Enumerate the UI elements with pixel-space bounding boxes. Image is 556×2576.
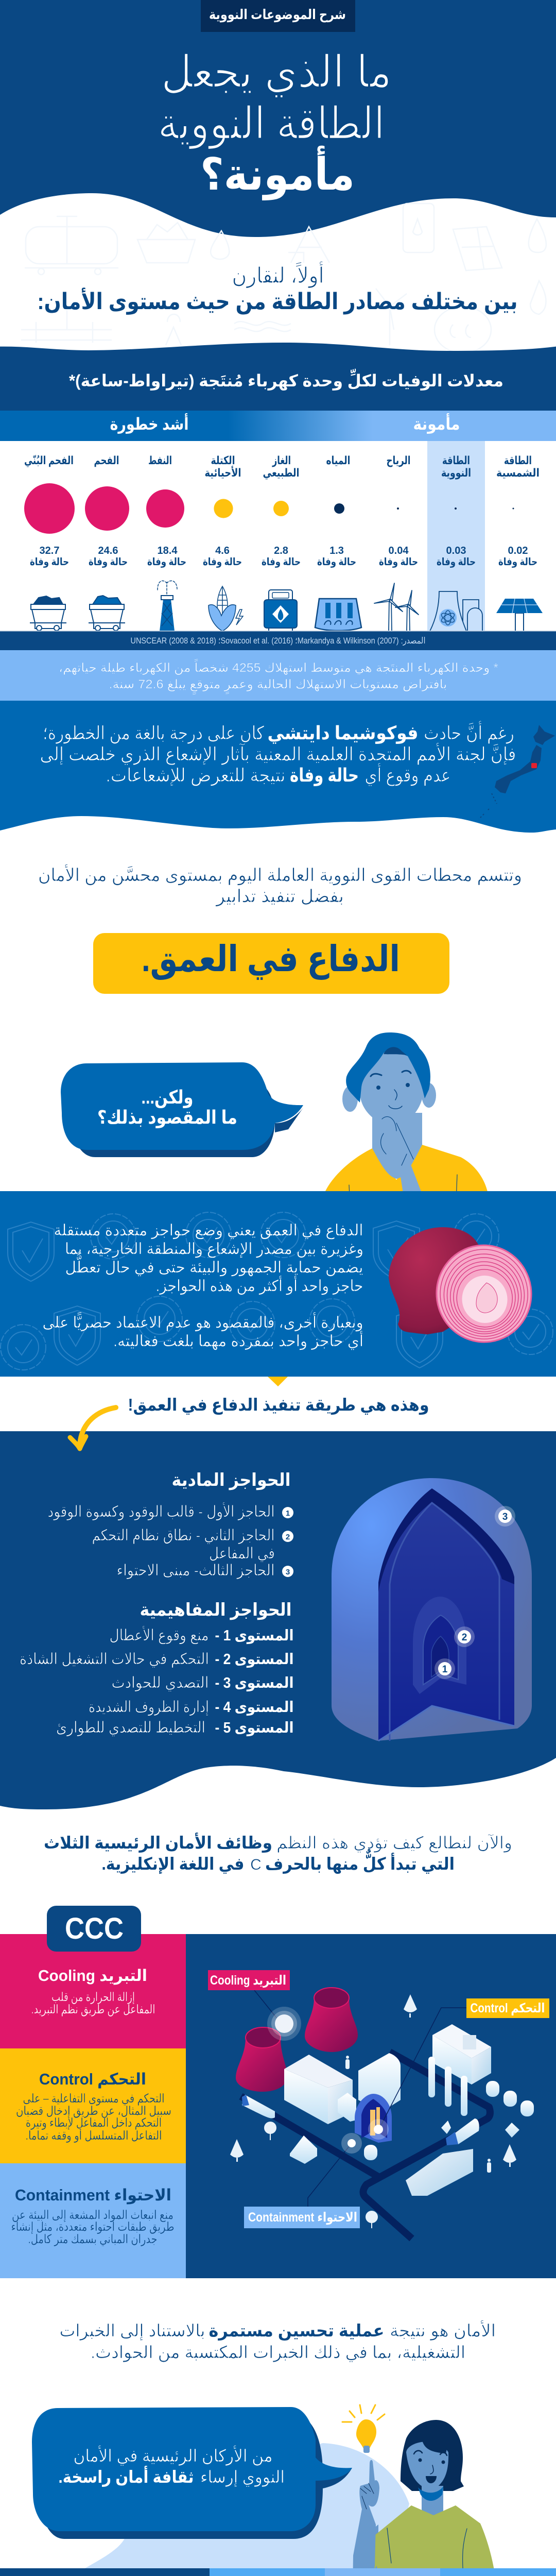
text block: three safety functions intro: التي تبدأ كلٌّ منها بالحرف: [265, 1849, 455, 1874]
tag: control: [466, 1998, 549, 2018]
text block: enhanced safety intro: [38, 864, 522, 907]
chart: energy source labels: النفط: [148, 454, 172, 467]
illustration: thinking man: [322, 1032, 490, 1240]
panel: defence in depth explanation: [0, 1191, 556, 1377]
panel: containment: طريق طبقات احتواء متعددة، مثل إنشاء: [11, 2220, 174, 2234]
text block: three safety functions intro: [44, 1832, 512, 1874]
gradient scale: safest to most dangerous: أشد خطورة: [110, 413, 188, 434]
chart: death rate values: 24.6: [98, 545, 118, 556]
section: physical barriers list: 1: [286, 1509, 290, 1518]
markers: [267, 2007, 389, 2154]
callout lines: [254, 1990, 466, 2207]
panel: containment: الاحتواء Containment: [15, 2186, 171, 2205]
chart: energy source labels: [24, 454, 540, 480]
source strip: [0, 631, 556, 650]
pipes: [428, 2057, 467, 2116]
buildings: [284, 2024, 519, 2196]
section: physical barriers list: الحاجز الأول - قالب الوقود وكسوة الوقود: [47, 1501, 275, 1521]
panel: containment: جدران المباني بسمك متر كامل.: [28, 2232, 158, 2246]
speech bubble: safety culture: من الأركان الرئيسية في الأمان: [73, 2445, 273, 2466]
panel: cooling: [0, 1934, 186, 2048]
chart: death rate values: 4.6: [215, 545, 230, 556]
panel: containment: [0, 2163, 186, 2278]
illustration: nuclear power plant panel: [186, 1934, 556, 2278]
text block: defence in depth definition: أي حاجز واحد بمفرده مهما بلغت فعاليته.: [113, 1330, 363, 1350]
header tag: nuclear explained: [201, 0, 355, 32]
illustration: reactor containment cross-section: 2: [462, 1632, 467, 1643]
chart: energy source labels: المياه: [326, 454, 350, 467]
title: ما الذي يجعل: [161, 47, 392, 98]
illustration: reactor containment cross-section: 3: [502, 1512, 508, 1522]
chart: energy source labels: الكتلة: [211, 454, 235, 467]
speech bubble: but what does that mean: ما المقصود بذلك؟: [97, 1107, 237, 1128]
chart: energy source labels: الشمسية: [496, 466, 540, 479]
panel: barriers background: [0, 1431, 556, 1809]
text block: Fukushima statement: رغم أنَّ حادث: [424, 721, 514, 744]
footnote band: بافتراض مستويات الاستهلاك الحالية وعمرٍ متوقعٍ يبلغ 72.6 سنة.: [109, 677, 447, 695]
mini containment with rods: [355, 2094, 392, 2143]
section: conceptual barriers list: إدارة الظروف الشديدة: [89, 1699, 209, 1716]
icon: map of Japan with Fukushima marked: [479, 725, 555, 819]
section: conceptual barriers list: التصدي للحوادث: [111, 1674, 209, 1691]
tag: containment: [244, 2207, 360, 2228]
tanks: [364, 2081, 534, 2160]
text block: enhanced safety intro: وتتسم محطات القوى النووية العاملة اليوم بمستوى محسَّن من الأمان: [38, 864, 522, 886]
chart: death rate values: حالة وفاة: [379, 556, 418, 568]
badge: CCC: [47, 1906, 141, 1952]
text block: three safety functions intro: وظائف الأمان الرئيسية الثلاث: [44, 1832, 272, 1853]
arrow: downward triangle: [268, 1377, 288, 1386]
chart: death rate values: 18.4: [158, 545, 178, 556]
chart: energy source labels: الفحم: [94, 454, 119, 467]
icon: coal cart: [89, 596, 125, 631]
text block: defence in depth definition: وبعبارة أخرى، فالمقصود هو عدم الاعتماد حصريًّا على: [42, 1312, 363, 1332]
card: questioning attitude: [210, 2568, 325, 2576]
section: physical barriers list: [47, 1470, 293, 1579]
chart: energy source labels: الطاقة: [504, 454, 532, 467]
panel: cooling: التبريد Cooling: [38, 1967, 147, 1985]
panel: control: سبيل المثال، عن طريق إدخال قضبان: [16, 2104, 171, 2119]
panel: hero background with wavy edge: [0, 0, 556, 237]
tag: control: التحكم Control: [470, 2001, 545, 2015]
chart: energy source labels: الطبيعي: [263, 466, 300, 480]
title: [158, 47, 392, 200]
illustration: reactor containment cross-section: [332, 1478, 532, 1741]
chart: energy source labels: الأحيائية: [205, 465, 241, 479]
chart: death rate values: حالة وفاة: [203, 556, 242, 568]
panel: cooling: إزالة الحرارة من قلب: [51, 1990, 135, 2005]
chart: energy source labels: الطاقة: [442, 454, 470, 467]
section: conceptual barriers list: التخطيط للتصدي للطوارئ: [56, 1719, 205, 1736]
panel: chart heading band: معدلات الوفيات لكلِّ وحدة كهرباء مُنتَجة (تيراواط-ساعة)*: [69, 368, 503, 391]
comparison intro heading: [37, 261, 518, 315]
chart: death rate values: حالة وفاة: [498, 556, 537, 568]
callout: defence in depth: الدفاع في العمق.: [142, 939, 400, 980]
comparison intro heading: أولاً، لنقارن: [232, 261, 324, 288]
illustration: woman with idea: [342, 2405, 494, 2576]
section: conceptual barriers list: التحكم في حالات التشغيل الشاذة: [20, 1651, 209, 1668]
icon: oil derrick: [158, 581, 177, 631]
section: conceptual barriers list: المستوى 4 -: [215, 1699, 293, 1716]
text block: Fukushima statement: فإنَّ لجنة الأمم المتحدة العلمية المعنية بآثار الإشعاع الذري خلصت إلى: [40, 742, 516, 765]
callout: defence in depth: [93, 933, 449, 994]
chart: death rate values: حالة وفاة: [437, 556, 476, 568]
chart: energy source labels: الغاز: [272, 454, 291, 467]
speech bubble: safety culture: [32, 2407, 352, 2539]
title: الطاقة النووية: [158, 99, 385, 149]
chart: death rate values: حالة وفاة: [317, 556, 356, 568]
chart: energy source labels: الرياح: [386, 454, 411, 467]
icon: wind turbines: [374, 583, 419, 631]
background blob behind woman: [85, 2443, 409, 2568]
trucks: [242, 2095, 479, 2145]
icon: natural gas cylinder: [264, 590, 297, 631]
section: conceptual barriers list: [20, 1600, 293, 1736]
gradient scale: safest to most dangerous: [0, 411, 556, 441]
icon: hydro dam: [315, 599, 361, 631]
footnote band: * وحدة الكهرباء المنتَجة هي متوسط استهلاك 4255 شخصاً من الكهرباء طيلة حياتهم،: [59, 659, 498, 675]
section: conceptual barriers list: المستوى 1 -: [215, 1628, 293, 1644]
background: faint energy icon pattern: [21, 204, 546, 353]
chart: energy source labels: الفحم البُنّي: [24, 454, 74, 467]
chart: death rate values: 2.8: [274, 545, 288, 556]
section: conceptual barriers list: المستوى 2 -: [215, 1651, 293, 1668]
trees: [230, 1994, 516, 2228]
icon: solar panel: [496, 599, 543, 631]
source strip: المصدر: Markandya & Wilkinson (2007)؛ Sovacool et al. (2016)؛ UNSCEAR (2008 & 2018): [131, 636, 425, 646]
panel: safety culture explanation: [0, 2568, 210, 2576]
chart: death rate values: حالة وفاة: [147, 556, 186, 568]
footnote band: [0, 650, 556, 701]
highlight column: nuclear: [427, 441, 485, 631]
badge: CCC: CCC: [65, 1912, 124, 1945]
text block: continuous improvement: التشغيلية، بما في ذلك الخبرات المكتسبة من الحوادث.: [91, 2343, 465, 2362]
section: conceptual barriers list: الحواجز المفاهيمية: [140, 1600, 291, 1620]
text block: defence in depth definition: [42, 1222, 363, 1350]
panel: containment: منع انبعاث المواد المشعة إلى البيئة عن: [12, 2208, 173, 2223]
section: conceptual barriers list: المستوى 5 -: [215, 1720, 293, 1736]
chart: death rate values: 0.02: [508, 545, 528, 556]
tower: front cooling tower: [236, 2027, 287, 2092]
text block: three safety functions intro: والآن لنطالع كيف تؤدي هذه النظم: [276, 1833, 512, 1853]
arrow: curved yellow arrow: [70, 1408, 116, 1449]
icon: nuclear plant: [430, 591, 482, 631]
text block: defence in depth definition: يضمن حماية الجمهور والبيئة حتى في حال تعطُّل: [65, 1251, 363, 1277]
chart: death rate values: 32.7: [40, 545, 59, 556]
text block: continuous improvement: بالاستناد إلى الخبرات: [60, 2321, 205, 2341]
section: physical barriers list: الحواجز المادية: [172, 1470, 290, 1490]
section: physical barriers list: الحاجز الثاني - نطاق نظام التحكم: [92, 1527, 275, 1545]
gradient scale: safest to most dangerous: مأمونة: [413, 413, 460, 434]
text block: enhanced safety intro: بفضل تنفيذ تدابير: [215, 887, 344, 907]
panel: chart heading band: [0, 343, 556, 411]
chart: death rate values: [30, 545, 537, 568]
section: physical barriers list: 3: [286, 1568, 290, 1577]
section: physical barriers list: 2: [286, 1533, 290, 1541]
text block: continuous improvement: [60, 2320, 496, 2362]
panel: Fukushima background: [0, 701, 556, 833]
people: [345, 2056, 491, 2173]
chart: energy source labels: النووية: [441, 466, 471, 480]
panel: control: التحكم Control: [39, 2070, 146, 2089]
text block: continuous improvement: الأمان هو نتيجة: [390, 2320, 496, 2341]
chart: death rate values: 0.04: [389, 545, 409, 556]
speech bubble: safety culture: ثقافة أمان راسخة.: [59, 2466, 194, 2487]
chart: death rate values: حالة وفاة: [89, 556, 128, 568]
text block: defence in depth definition: حاجز واحد أو أكثر من هذه الحواجز.: [155, 1275, 363, 1295]
card: open communication: [440, 2568, 556, 2576]
icon: lignite cart: [30, 596, 66, 631]
text block: three safety functions intro: في اللغة الإنكليزية.: [102, 1854, 244, 1874]
text block: Fukushima statement: عدم وقوع أي: [364, 763, 451, 786]
panel: control: [0, 2048, 186, 2163]
panel: control: التفاعل المتسلسل أو وقفه تماما.: [26, 2127, 162, 2143]
icon: biomass corn: [208, 586, 243, 631]
section: physical barriers list: في المفاعل: [209, 1545, 275, 1563]
chart: death rate values: حالة وفاة: [30, 556, 69, 568]
header tag: nuclear explained: شرح الموضوعات النووية: [209, 7, 346, 23]
card: rigorous and prudent approach: [325, 2568, 440, 2576]
panel: control: التحكم داخل المفاعل لإبطاء وتيرة: [26, 2116, 162, 2130]
section: physical barriers list: الحاجز الثالث- مبنى الاحتواء: [116, 1562, 275, 1579]
heading: how defence in depth is applied: وهذه هي طريقة تنفيذ الدفاع في العمق!: [128, 1395, 429, 1415]
speech bubble: safety culture: النووي إرساء: [200, 2467, 285, 2487]
tag: containment: الاحتواء Containment: [248, 2210, 357, 2225]
background: shield and badge pattern: [1, 1212, 553, 1370]
chart: death rate bubbles: [24, 483, 514, 534]
text block: Fukushima statement: نتيجة للتعرض للإشعاعات.: [106, 765, 285, 786]
chart: death rate values: 1.3: [329, 545, 344, 556]
tower: back cooling tower: [305, 1988, 358, 2052]
chart: death rate values: حالة وفاة: [262, 556, 301, 568]
title: مأمونة؟: [200, 145, 355, 200]
chart: death rate values: 0.03: [446, 545, 466, 556]
speech bubble: but what does that mean: [61, 1062, 303, 1157]
speech bubble: but what does that mean: ولكن...: [141, 1087, 194, 1108]
panel: control: التحكم في مستوى التفاعلية – على: [23, 2092, 165, 2106]
section: conceptual barriers list: منع وقوع الأعطال: [109, 1625, 209, 1645]
illustration: red onion: [389, 1227, 537, 1348]
text block: continuous improvement: عملية تحسين مستمرة: [209, 2321, 384, 2341]
tag: cooling: [208, 1970, 290, 1990]
section: conceptual barriers list: المستوى 3 -: [215, 1675, 293, 1691]
text block: Fukushima statement: حالة وفاة: [290, 765, 359, 786]
text block: defence in depth definition: الدفاع في العمق يعني وضع حواجز متعددة مستقلة: [54, 1222, 363, 1240]
illustration: reactor containment cross-section: 1: [442, 1664, 448, 1675]
tag: cooling: التبريد Cooling: [210, 1973, 286, 1988]
text block: Fukushima statement: فوكوشيما دايتشي: [268, 722, 418, 744]
text block: Fukushima statement: كان على درجة بالغة من الخطورة؛: [43, 722, 265, 744]
text block: Fukushima statement: [40, 721, 516, 786]
text block: three safety functions intro: C: [250, 1856, 262, 1873]
text block: defence in depth definition: وغزيرة بين مصدر الإشعاع والمنطقة الخارجية، بما: [65, 1241, 363, 1258]
panel: cooling: المفاعل عن طريق نظم التبريد.: [31, 2003, 155, 2016]
